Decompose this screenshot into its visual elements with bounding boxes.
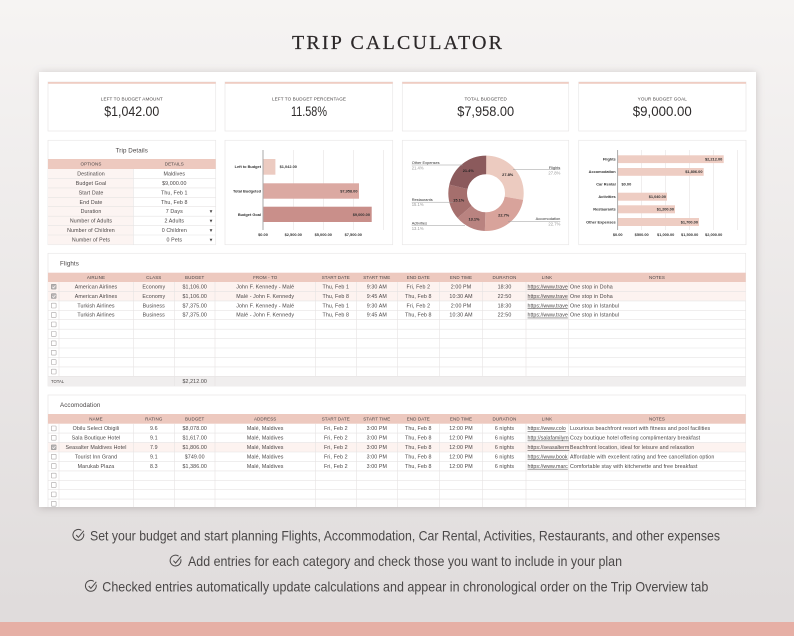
bar chart: budget summary: $9,000.00 <box>353 212 370 217</box>
panel: trip details table: 0 Pets <box>166 238 182 244</box>
flight row 3: $7,375.00 <box>182 303 207 309</box>
panel: trip details table: OPTIONS <box>81 162 101 167</box>
flight row 3: John F. Kennedy - Malé <box>236 303 294 309</box>
flight row 3: 2:00 PM <box>451 303 471 309</box>
icon: check circle <box>85 580 96 591</box>
flight row 1: Fri, Feb 2 <box>406 284 430 290</box>
flight row 3: 18:30 <box>498 303 511 309</box>
flight row 2: Economy <box>142 294 165 300</box>
hotel row 4: Tourist Inn Grand <box>75 454 117 460</box>
heading: flights: Flights <box>60 260 79 267</box>
flight row 2: American Airlines <box>75 294 118 300</box>
donut chart: expense share: Flights <box>549 165 560 170</box>
feature line 3: Checked entries automatically update calculations and appear in chronological order on the Trip Overview tab <box>102 580 708 594</box>
hotel row 3: $1,806.00 <box>182 445 207 451</box>
bar chart: spending by category: $2,212.00 <box>705 156 722 162</box>
hotel row 1: Fri, Feb 2 <box>324 426 348 432</box>
panel: accommodation table <box>48 395 746 515</box>
accommodation header row: ADDRESS <box>254 417 276 422</box>
hotel row 1: 9.6 <box>150 426 158 432</box>
donut chart: expense share: 13.1% <box>412 226 424 231</box>
donut chart: expense share: 15.1% <box>412 202 424 207</box>
hotel row 4: Fri, Feb 2 <box>324 454 348 460</box>
title: TRIP CALCULATOR <box>292 32 503 54</box>
bar chart: budget summary: $0.00 <box>258 232 268 237</box>
flight row 1: One stop in Doha <box>570 284 613 290</box>
accommodation header row: BUDGET <box>185 417 205 422</box>
panel: trip details table: ▾ <box>210 238 213 244</box>
hotel row 1 <box>73 426 711 432</box>
panel: trip details table: ▾ <box>210 219 213 225</box>
hotel row 2: Fri, Feb 2 <box>324 436 348 442</box>
panel: trip details table: Thu, Feb 8 <box>161 200 188 206</box>
hotel row 1: Luxurious beachfront resort with fitness and pool facilities <box>570 426 711 432</box>
hotel row 5: Marukab Plaza <box>78 464 114 470</box>
bar chart: spending by category: Flights <box>603 156 616 162</box>
bar chart: budget summary: $5,000.00 <box>315 232 332 237</box>
hotel row 1: Obilu Select Obigili <box>73 426 119 432</box>
flight row 2: Thu, Feb 8 <box>405 294 432 300</box>
flight row 2: One stop in Doha <box>570 294 613 300</box>
hotel row 4: https://www.book <box>528 454 568 460</box>
hotel row 2 <box>72 436 701 442</box>
hotel row 2: 9.1 <box>150 436 158 442</box>
flight row 1: Thu, Feb 1 <box>322 284 349 290</box>
accommodation header row: START DATE <box>322 417 350 422</box>
hotel row 5: Comfortable stay with kitchenette and free breakfast <box>570 464 698 470</box>
flight row 3 <box>77 303 619 309</box>
KPI card: left to budget percentage <box>225 82 393 131</box>
hotel row 1: $8,078.00 <box>182 426 207 432</box>
panel: trip details table: Budget Goal <box>76 181 106 187</box>
bar chart: spending by category: Car Rental <box>596 182 616 187</box>
hotel row 5 <box>78 464 698 470</box>
flight row 4: Malé - John F. Kennedy <box>236 313 294 319</box>
feature line 2: Add entries for each category and check those you want to include in your plan <box>188 554 622 569</box>
bar chart: budget summary: Left to Budget <box>235 164 262 169</box>
flight row 4: 9:45 AM <box>367 313 387 319</box>
table header row: END TIME <box>450 275 472 280</box>
flight row 1: 18:30 <box>498 284 511 290</box>
accommodation checkboxes <box>51 426 56 506</box>
donut chart: expense share: 27.8% <box>502 172 514 177</box>
donut chart: expense share: 21.4% <box>412 165 424 170</box>
panel: trip details table: Number of Children <box>67 228 115 234</box>
panel: trip details table: Start Date <box>79 190 103 196</box>
hotel row 1: Thu, Feb 8 <box>405 426 432 432</box>
flight row 1: https://www.trave <box>528 284 568 290</box>
bar chart: spending by category: $1,040.00 <box>649 194 666 199</box>
panel: trip details table: Maldives <box>163 172 185 178</box>
bar chart: budget summary: $7,958.00 <box>340 188 358 193</box>
feature line 1: Set your budget and start planning Flights, Accommodation, Car Rental, Activities, Restaurants, and other expenses <box>90 528 720 544</box>
panel: trip details table: 2 Adults <box>164 219 184 225</box>
KPI card: left to budget amount: $1,042.00 <box>104 103 159 119</box>
flight row 4: https://www.trave <box>528 313 568 319</box>
flight row 1 <box>75 284 613 290</box>
bar chart: budget summary: $2,500.00 <box>285 232 302 237</box>
flight row 3: Turkish Airlines <box>77 303 115 309</box>
flight row 4: 22:50 <box>498 313 511 319</box>
donut chart: expense share: 13.1% <box>468 216 480 222</box>
panel: trip details table: Number of Adults <box>70 219 112 225</box>
hotel row 2: 6 nights <box>495 436 514 442</box>
hotel row 4: Affordable with excellent rating and free cancellation option <box>570 454 714 460</box>
bar chart: spending by category: $1,806.00 <box>685 169 702 174</box>
hotel row 5: Malé, Maldives <box>247 464 284 470</box>
table header row: BUDGET <box>185 275 205 280</box>
flight row 2 <box>75 294 613 300</box>
accommodation header row: NOTES <box>649 417 665 422</box>
hotel row 3: 6 nights <box>495 445 514 451</box>
flight row 4: 10:30 AM <box>449 313 473 319</box>
flight row 4: Thu, Feb 8 <box>322 313 349 319</box>
accommodation header row: START TIME <box>363 417 390 422</box>
total row: TOTAL <box>51 379 65 384</box>
bar chart: spending by category: $1,500.00 <box>681 232 698 237</box>
panel: trip details table: End Date <box>80 200 102 206</box>
hotel row 4: Malé, Maldives <box>247 454 284 460</box>
flight row 4 <box>77 313 619 319</box>
flight row 1: John F. Kennedy - Malé <box>236 284 294 290</box>
table header row: END DATE <box>407 275 430 280</box>
hotel row 2: $1,617.00 <box>182 436 207 442</box>
accommodation header row: END DATE <box>407 417 430 422</box>
KPI card: total budgeted: TOTAL BUDGETED <box>464 97 507 102</box>
donut chart: expense share: 22.7% <box>548 221 561 226</box>
bar chart: spending by category: $2,000.00 <box>705 232 722 237</box>
icon: check circle <box>170 555 181 566</box>
KPI card: your budget goal <box>579 82 746 131</box>
flight row 3: Thu, Feb 1 <box>322 303 349 309</box>
hotel row 1: 6 nights <box>495 426 514 432</box>
KPI card: total budgeted: $7,958.00 <box>457 103 514 119</box>
flight row 3: Business <box>143 303 165 309</box>
flight row 2: 9:45 AM <box>367 294 387 300</box>
accommodation header row: RATING <box>145 417 163 422</box>
hotel row 5: Thu, Feb 8 <box>405 464 432 470</box>
flight row 1: Economy <box>142 284 165 290</box>
hotel row 5: 3:00 PM <box>367 464 387 470</box>
table header row: CLASS <box>146 275 161 280</box>
accommodation header row: DURATION <box>493 417 516 422</box>
bar chart: budget summary <box>225 140 393 245</box>
heading: accommodation: Accomodation <box>60 402 101 409</box>
flight row 4: $7,375.00 <box>182 313 207 319</box>
flight row 4: Thu, Feb 8 <box>405 313 432 319</box>
flight row 2: 10:30 AM <box>449 294 473 300</box>
hotel row 4: $749.00 <box>185 454 205 460</box>
accommodation header row: END TIME <box>450 417 472 422</box>
flight row 1: 9:30 AM <box>367 284 387 290</box>
donut chart: expense share: 15.1% <box>453 198 465 202</box>
KPI card: left to budget percentage: 11.58% <box>291 103 327 119</box>
bar chart: spending by category: Other Expenses <box>586 219 616 224</box>
bar chart: spending by category <box>579 140 746 245</box>
bar chart: spending by category: $0.00 <box>622 182 631 187</box>
bar chart: budget summary: Total Budgeted <box>233 188 262 193</box>
panel: trip details table: $9,000.00 <box>162 181 187 187</box>
flight row 1: American Airlines <box>75 284 118 290</box>
bar chart: budget summary: $1,042.00 <box>280 164 297 169</box>
panel: flights table <box>48 253 746 386</box>
flight row 2: $1,106.00 <box>182 294 207 300</box>
hotel row 3: 7.9 <box>150 445 158 451</box>
hotel row 2: Malé, Maldives <box>247 436 284 442</box>
table header row: DURATION <box>493 275 516 280</box>
donut chart: expense share: Activities <box>412 221 427 226</box>
bar chart: spending by category: $500.00 <box>635 232 649 237</box>
accommodation header row <box>90 418 665 420</box>
total row: $2,212.00 <box>182 379 207 385</box>
flight row 3: Fri, Feb 2 <box>406 303 430 309</box>
table header row <box>87 275 665 280</box>
panel: trip details table: Duration <box>81 209 101 215</box>
panel: trip details table: Destination <box>77 172 105 178</box>
flight row 2: Malé - John F. Kennedy <box>236 294 294 300</box>
accommodation header row: LINK <box>542 417 552 422</box>
bar chart: spending by category: Accomodation <box>589 169 616 174</box>
panel: trip details table: Thu, Feb 1 <box>161 190 188 196</box>
donut chart: expense share: Other Expenses <box>412 160 440 165</box>
table header row: START TIME <box>363 275 390 280</box>
KPI card: total budgeted <box>402 82 569 131</box>
KPI card: your budget goal: $9,000.00 <box>633 103 692 119</box>
panel: trip details table: 7 Days <box>166 209 183 215</box>
hotel row 3: 12:00 PM <box>449 445 473 451</box>
hotel row 5: 8.3 <box>150 464 158 470</box>
flight row 4: One stop in Istanbul <box>570 313 619 319</box>
hotel row 2: http://salafamilym <box>528 436 569 442</box>
hotel row 5: Fri, Feb 2 <box>324 464 348 470</box>
hotel row 4: 9.1 <box>150 454 158 460</box>
icon: check circle <box>73 529 84 540</box>
bar chart: budget summary: Budget Goal <box>238 212 261 217</box>
bar chart: spending by category: Restaurants <box>593 207 616 212</box>
table header row: AIRLINE <box>87 275 105 280</box>
total row <box>51 379 207 385</box>
hotel row 5: 12:00 PM <box>449 464 473 470</box>
hotel row 2: 12:00 PM <box>449 436 473 442</box>
KPI card: left to budget amount <box>48 82 216 131</box>
hotel row 2: 3:00 PM <box>367 436 387 442</box>
hotel row 4: 3:00 PM <box>367 454 387 460</box>
hotel row 3: Seasalter Maldives Hotel <box>66 445 126 451</box>
hotel row 3: 3:00 PM <box>367 445 387 451</box>
bar chart: spending by category: $1,000.00 <box>657 232 674 237</box>
hotel row 3: Thu, Feb 8 <box>405 445 432 451</box>
KPI card: left to budget percentage: LEFT TO BUDGET PERCENTAGE <box>272 97 346 102</box>
hotel row 1: 12:00 PM <box>449 426 473 432</box>
panel: trip details table: ▾ <box>210 228 213 234</box>
bar chart: spending by category: $1,200.00 <box>657 207 674 212</box>
flight row 1: $1,106.00 <box>182 284 207 290</box>
hotel row 4: 12:00 PM <box>449 454 473 460</box>
flight row 4: Business <box>143 313 165 319</box>
flight row 1: 2:00 PM <box>451 284 471 290</box>
hotel row 3: https://seasalterm <box>528 445 570 451</box>
hotel row 5: $1,386.00 <box>182 464 207 470</box>
panel: trip details table: ▾ <box>210 209 213 215</box>
hotel row 1: 3:00 PM <box>367 426 387 432</box>
panel: trip details table <box>48 140 216 245</box>
donut chart: expense share: Restaurants <box>412 197 433 202</box>
hotel row 2: Sala Boutique Hotel <box>72 436 120 442</box>
table header row: START DATE <box>322 275 350 280</box>
heading: trip details: Trip Details <box>116 147 148 154</box>
table header row: LINK <box>542 275 552 280</box>
flight row 4: Turkish Airlines <box>77 313 115 319</box>
flight row 3: One stop in Istanbul <box>570 303 619 309</box>
hotel row 2: Thu, Feb 8 <box>405 436 432 442</box>
hotel row 1: https://www.colo <box>528 426 566 432</box>
checkboxes <box>51 284 56 374</box>
flight row 2: https://www.trave <box>528 294 568 300</box>
panel: trip details table: DETAILS <box>165 162 184 167</box>
donut chart: expense share: 27.8% <box>548 170 561 175</box>
bar chart: spending by category: $1,700.00 <box>681 219 698 224</box>
spreadsheet panel <box>39 72 756 507</box>
panel: trip details table: 0 Children <box>162 228 187 234</box>
hotel row 1: Malé, Maldives <box>247 426 284 432</box>
donut chart: expense share <box>402 140 569 245</box>
KPI card: left to budget amount: LEFT TO BUDGET AMOUNT <box>101 97 163 102</box>
hotel row 2: Cozy boutique hotel offering complimentary breakfast <box>570 436 701 442</box>
hotel row 5: 6 nights <box>495 464 514 470</box>
hotel row 4: 6 nights <box>495 454 514 460</box>
hotel row 3 <box>66 445 694 451</box>
hotel row 4 <box>75 454 714 460</box>
flight row 2: 22:50 <box>498 294 511 300</box>
flight row 3: https://www.trave <box>528 303 568 309</box>
hotel row 4: Thu, Feb 8 <box>405 454 432 460</box>
bar chart: budget summary: $7,500.00 <box>345 232 362 237</box>
table header row: FROM - TO <box>253 275 278 280</box>
accommodation header row: NAME <box>89 417 103 422</box>
hotel row 3: Malé, Maldives <box>247 445 284 451</box>
donut chart: expense share: 22.7% <box>498 212 510 218</box>
bottom accent band <box>0 622 794 636</box>
donut chart: expense share: Accomodation <box>536 216 560 221</box>
table header row: NOTES <box>649 275 665 280</box>
flight row 3: 9:30 AM <box>367 303 387 309</box>
bar chart: spending by category: $0.00 <box>613 232 623 237</box>
flight row 2: Thu, Feb 8 <box>322 294 349 300</box>
hotel row 5: https://www.marc <box>528 464 568 470</box>
hotel row 3: Fri, Feb 2 <box>324 445 348 451</box>
hotel row 3: Beachfront location, ideal for leisure and relaxation <box>570 445 694 451</box>
donut chart: expense share: 21.4% <box>463 168 474 173</box>
KPI card: your budget goal: YOUR BUDGET GOAL <box>638 97 687 102</box>
bar chart: spending by category: Activities <box>598 194 616 199</box>
panel: trip details table: Number of Pets <box>72 238 110 244</box>
